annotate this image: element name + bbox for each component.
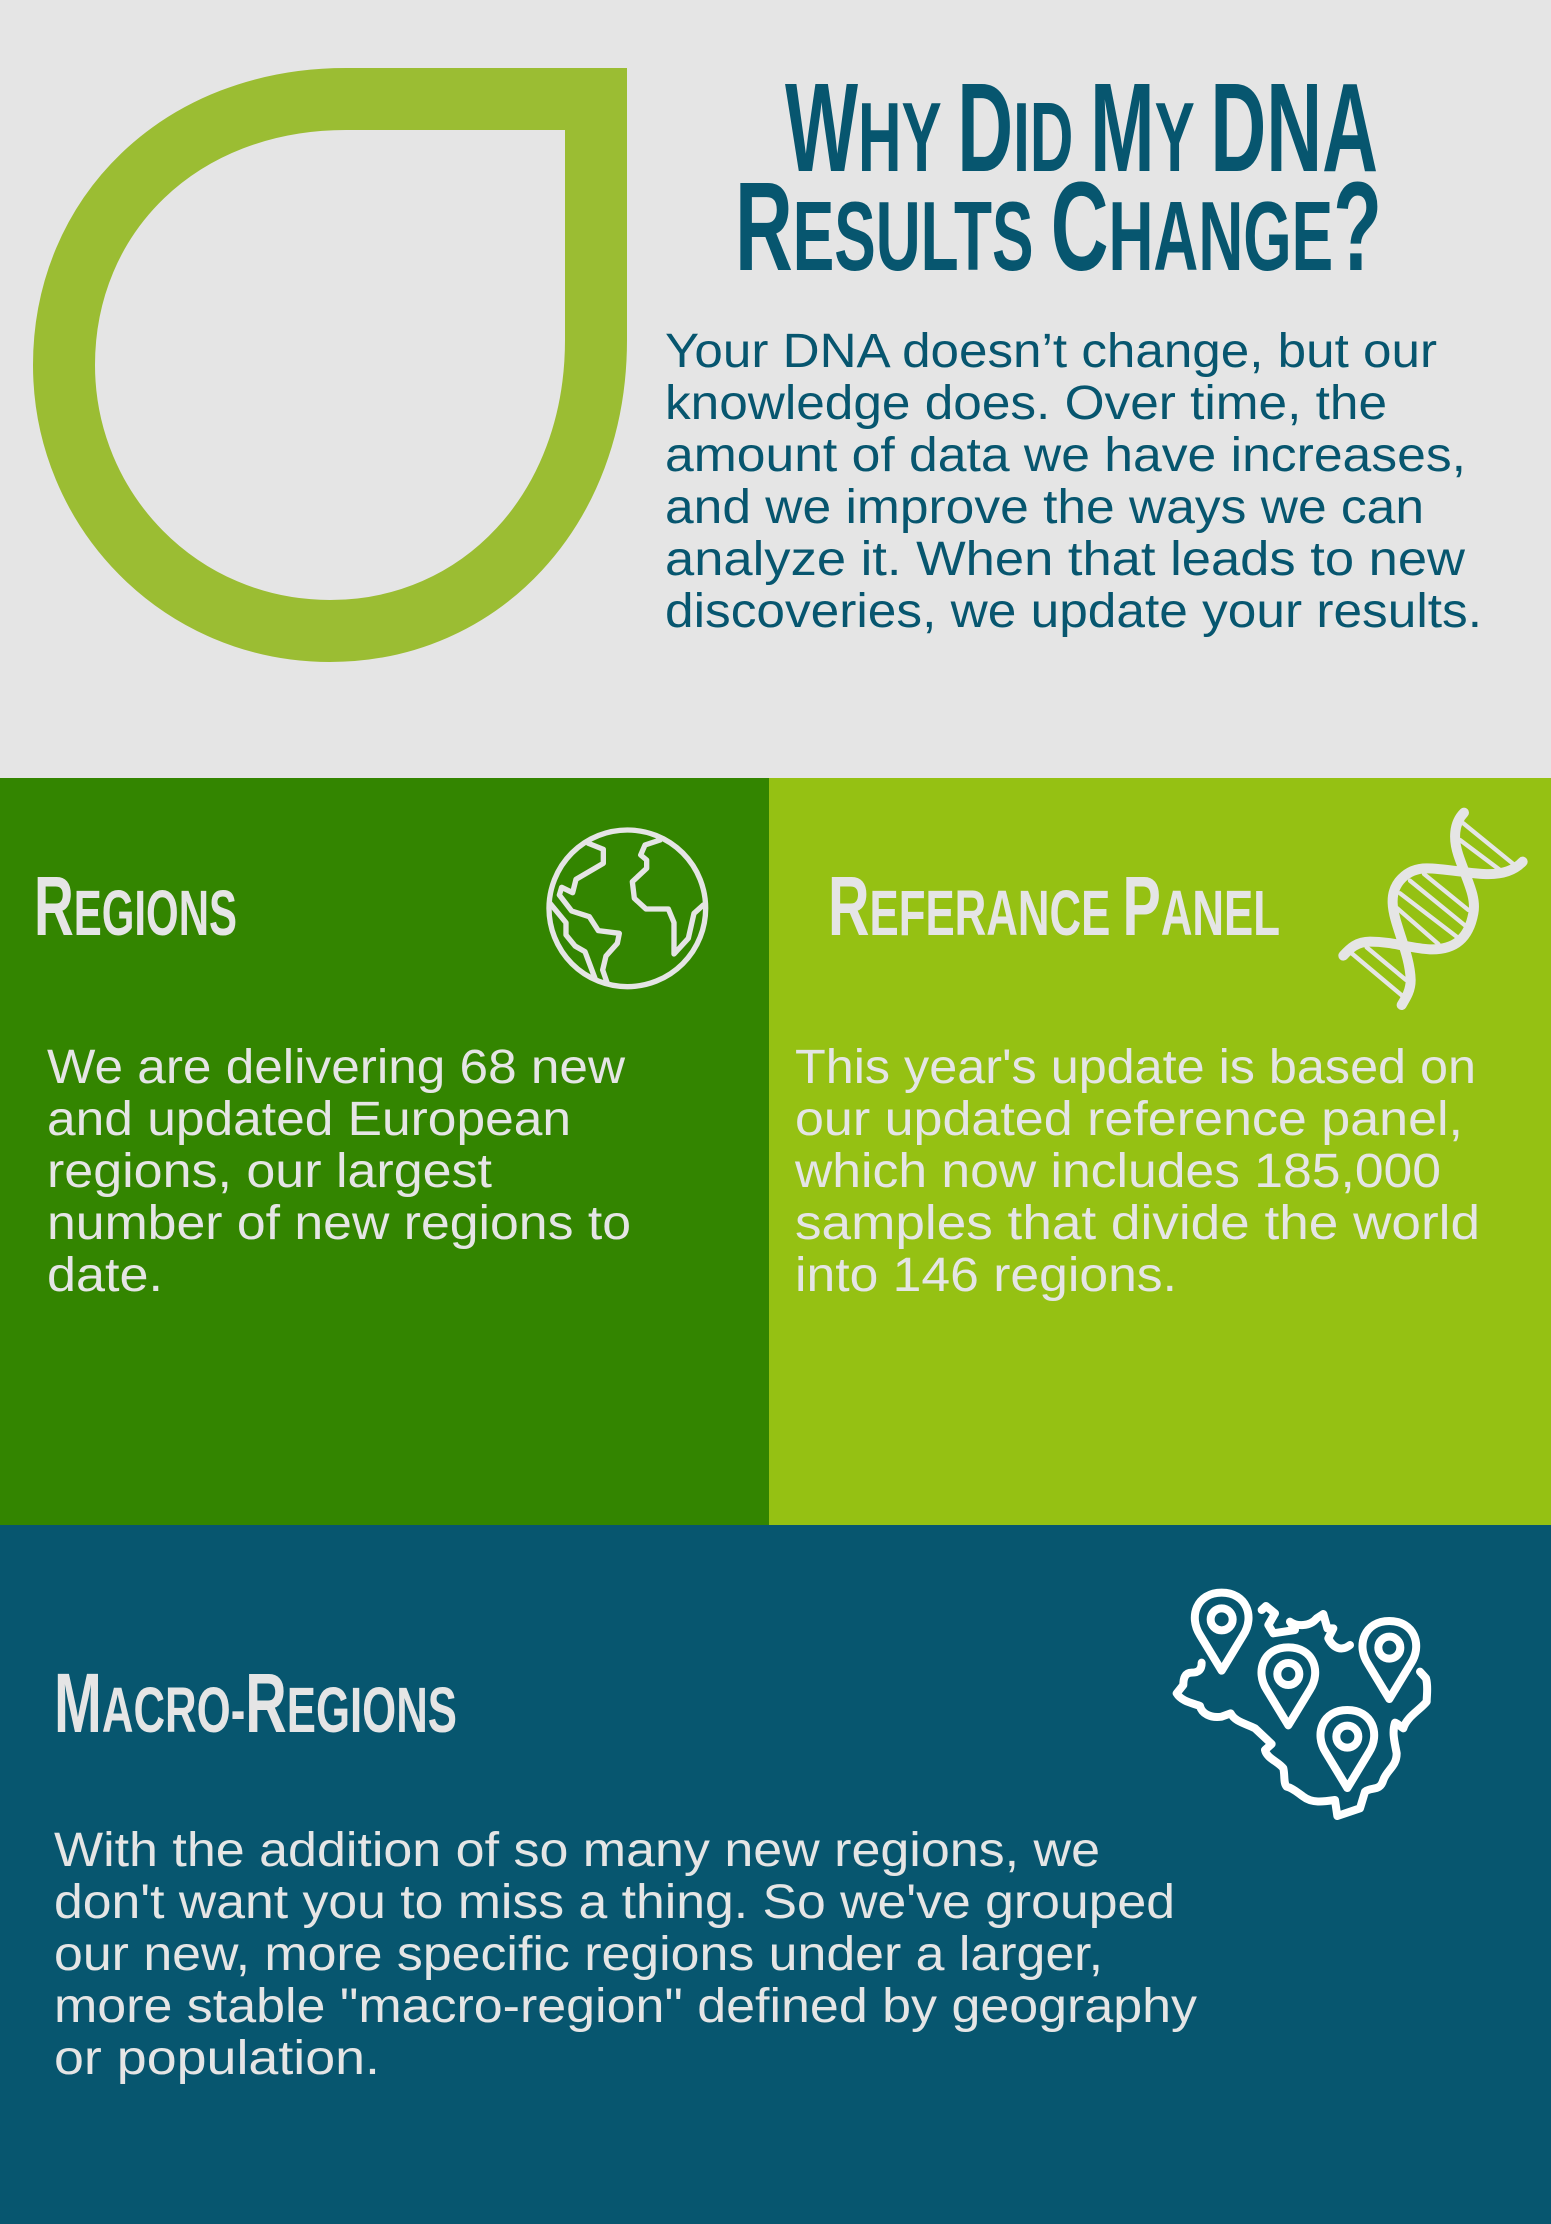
- text block: regions body: number of new regions to: [47, 1197, 631, 1250]
- text block: macro-regions body: more stable "macro-region" defined by geography: [54, 1980, 1197, 2033]
- text block: macro-regions body: our new, more specific regions under a larger,: [54, 1928, 1103, 1981]
- title: RESULTS CHANGE?: [735, 156, 1382, 297]
- title: WHY DID MY DNA: [785, 57, 1378, 198]
- panel: reference panel: [769, 778, 1551, 1525]
- panel: regions: [0, 778, 769, 1525]
- heading: reference panel: REFERANCE PANEL: [828, 859, 1280, 953]
- text block: reference panel body: This year's update is based on: [795, 1041, 1476, 1094]
- panel: header background: [0, 0, 1551, 778]
- text block: regions body: date.: [47, 1249, 163, 1302]
- title: [735, 57, 1382, 297]
- panel: macro-regions: [0, 1525, 1551, 2224]
- text block: regions body: [47, 1041, 631, 1302]
- icon: map with location pins: [1177, 1593, 1427, 1816]
- text block: reference panel body: our updated reference panel,: [795, 1093, 1463, 1146]
- text block: reference panel body: samples that divide the world: [795, 1197, 1480, 1250]
- text block: macro-regions body: don't want you to miss a thing. So we've grouped: [54, 1876, 1175, 1929]
- icon: dna helix: [1343, 813, 1523, 1005]
- heading: regions: REGIONS: [34, 859, 237, 953]
- text block: regions body: and updated European: [47, 1093, 571, 1146]
- text block: intro: knowledge does. Over time, the: [665, 377, 1387, 430]
- text block: intro: and we improve the ways we can: [665, 481, 1424, 534]
- text block: regions body: regions, our largest: [47, 1145, 492, 1198]
- text block: intro: discoveries, we update your results.: [665, 585, 1482, 638]
- text block: macro-regions body: or population.: [54, 2032, 380, 2085]
- text block: intro: analyze it. When that leads to new: [665, 533, 1465, 586]
- text block: reference panel body: [794, 1041, 1480, 1302]
- icon: globe: [549, 830, 706, 987]
- text block: reference panel body: into 146 regions.: [795, 1249, 1177, 1302]
- text block: macro-regions body: With the addition of so many new regions, we: [54, 1824, 1100, 1877]
- heading: macro-regions: MACRO-REGIONS: [54, 1656, 457, 1750]
- text block: intro: [665, 325, 1482, 638]
- text block: intro: amount of data we have increases,: [665, 429, 1466, 482]
- text block: reference panel body: which now includes 185,000: [794, 1145, 1441, 1198]
- text block: macro-regions body: [54, 1824, 1197, 2085]
- text block: intro: Your DNA doesn’t change, but our: [665, 325, 1437, 378]
- text block: regions body: We are delivering 68 new: [47, 1041, 625, 1094]
- icon: teardrop ring: [64, 99, 596, 631]
